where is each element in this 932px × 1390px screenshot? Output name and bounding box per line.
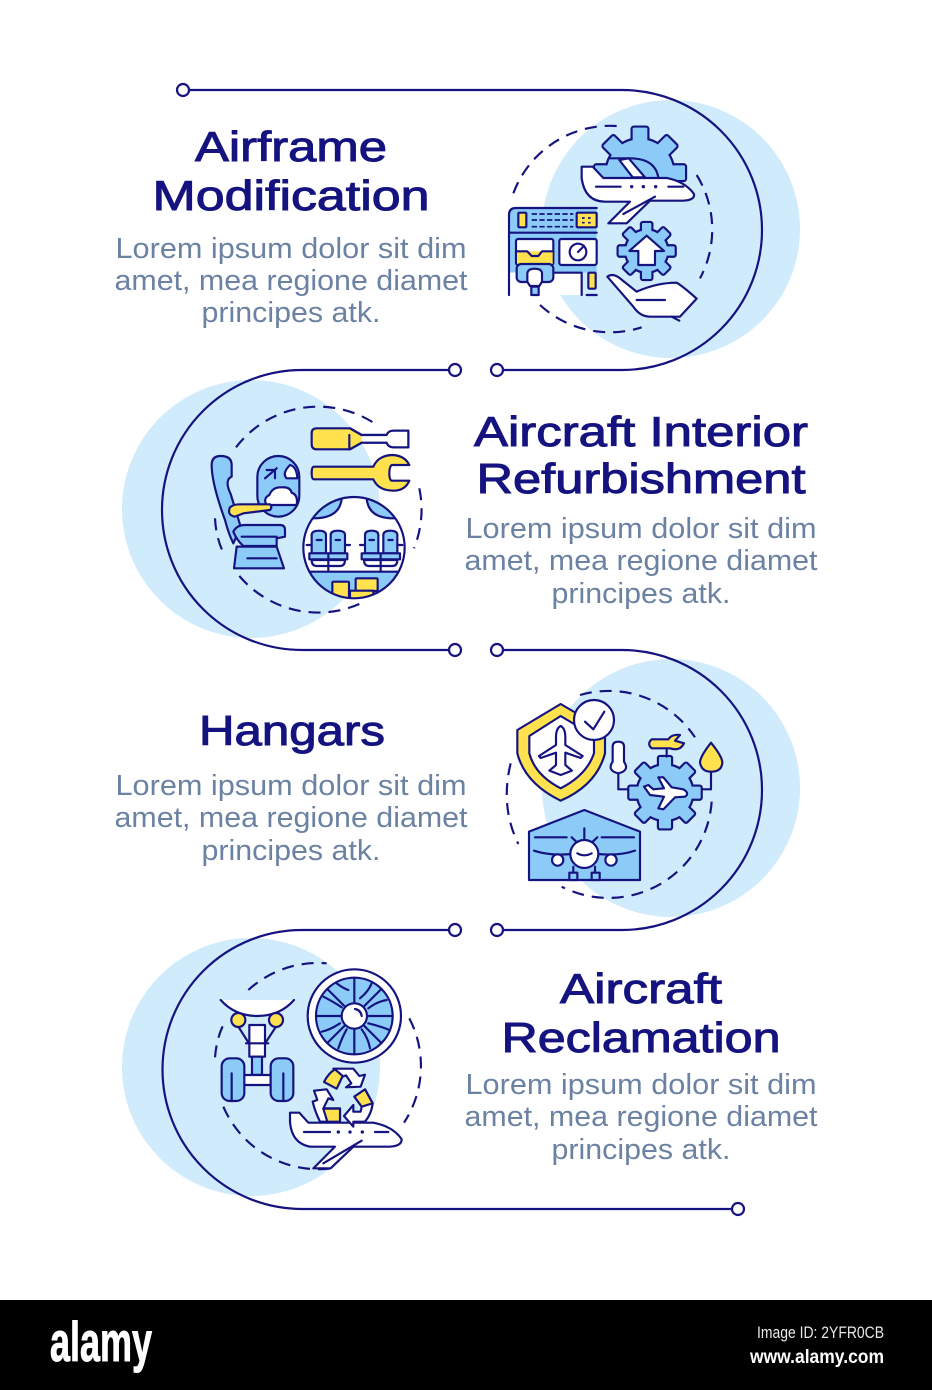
icon: shield, gear and hangar [507,691,722,898]
light blue circle [542,659,800,917]
body text: Lorem ipsum dolor sit dim [466,513,816,545]
connector line with arc [503,650,762,930]
body text: principes atk. [202,297,380,329]
heading: Aircraft Interior [474,408,808,455]
connector line with arc [190,90,762,370]
panel: hangars [114,644,800,930]
connector line with arc [162,370,449,650]
light blue circle [122,380,380,638]
body text: Lorem ipsum dolor sit dim [466,1069,816,1101]
connector dot top [449,924,461,936]
panel: aircraft reclamation [122,924,818,1215]
heading: Aircraft [560,965,722,1012]
light blue circle [122,938,380,1196]
website: www.alamy.com [749,1347,884,1368]
end dot left [449,364,461,376]
body text: Lorem ipsum dolor sit dim [116,770,466,802]
footer logo: alamy [50,1310,152,1373]
heading: Reclamation [502,1014,780,1061]
icon: plane, gears, cockpit panel and hand [508,126,712,332]
end dot [732,1203,744,1215]
icon: seat, window, tools and cabin [212,407,422,613]
panel: airframe modification [114,84,800,370]
connector line with arc [162,930,732,1209]
body text: Lorem ipsum dolor sit dim [116,233,466,265]
body text: amet, mea regione diamet [464,545,818,577]
end dot left [449,644,461,656]
image id: Image ID: 2YFR0CB [757,1323,884,1342]
heading: Airframe [195,123,387,170]
light blue circle [542,100,800,358]
heading: Hangars [199,707,385,754]
heading: Modification [152,172,430,219]
body text: principes atk. [552,1134,730,1166]
footer bar [0,1300,932,1390]
body text: amet, mea regione diamet [464,1101,818,1133]
end dot right [491,364,503,376]
panel: aircraft interior refurbishment [122,364,818,650]
connector dot right [491,924,503,936]
body text: amet, mea regione diamet [114,802,468,834]
heading: Refurbishment [476,455,806,502]
start dot [177,84,189,96]
end dot right [491,644,503,656]
body text: principes atk. [552,578,730,610]
body text: principes atk. [202,835,380,867]
body text: amet, mea regione diamet [114,265,468,297]
icon: landing gear, turbine, recycling and plane [215,963,421,1169]
